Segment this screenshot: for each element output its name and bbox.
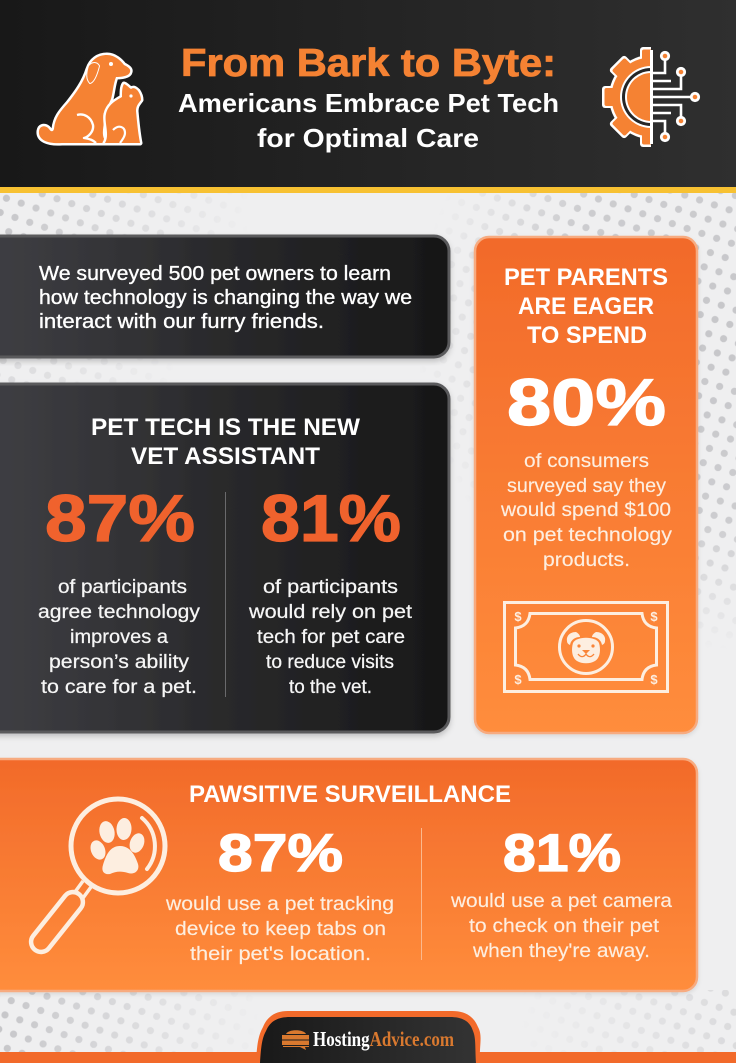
stat: 80%: products. <box>543 549 630 571</box>
heading <box>91 414 360 470</box>
icon: dollar bill with dog <box>504 602 668 692</box>
panel: pawsitive surveillance <box>0 759 697 991</box>
title <box>178 42 559 153</box>
stat: 87%: improves a <box>70 626 168 648</box>
heading: ARE EAGER <box>518 293 654 320</box>
stat: 87% <box>38 481 200 698</box>
icon: magnifying glass with paw <box>27 799 165 956</box>
stat: 81%: to the vet. <box>289 676 372 698</box>
logo wordmark: HostingAdvice.com <box>313 1027 454 1051</box>
icon: hosting logo <box>282 1030 309 1050</box>
stat: 81% <box>450 824 672 962</box>
stat: 81%: to reduce visits <box>266 651 394 673</box>
panel: intro <box>0 236 449 357</box>
icon: dollar bill with dog: $ <box>514 672 522 687</box>
title: Americans Embrace Pet Tech <box>178 88 559 118</box>
heading: PAWSITIVE SURVEILLANCE <box>189 781 511 808</box>
stat: 87%: 87% <box>45 481 195 555</box>
title: for Optimal Care <box>257 123 479 153</box>
intro text: We surveyed 500 pet owners to learn <box>39 263 391 285</box>
panel: pet tech is the new vet assistant <box>0 384 449 732</box>
stat: 81%: 81% <box>261 481 401 555</box>
stat: 81%: of participants <box>263 576 398 598</box>
intro text <box>39 263 412 333</box>
stat: 80%: surveyed say they <box>507 475 666 497</box>
heading: PET PARENTS <box>504 264 668 291</box>
stat: 87%: would use a pet tracking <box>165 893 394 915</box>
stat: 87%: person’s ability <box>49 651 189 673</box>
stat: 80% <box>500 365 672 571</box>
stat: 80%: would spend $100 <box>500 499 671 521</box>
stat: 87%: agree technology <box>38 601 200 623</box>
stat: 81%: would use a pet camera <box>450 890 672 912</box>
icon: dollar bill with dog: $ <box>650 609 658 624</box>
heading: PET TECH IS THE NEW <box>91 414 360 441</box>
intro text: interact with our furry friends. <box>39 311 324 333</box>
stat: 81% <box>248 481 413 698</box>
stat: 87%: device to keep tabs on <box>175 918 386 940</box>
icon: dollar bill with dog: $ <box>514 609 522 624</box>
title: From Bark to Byte: <box>181 42 556 85</box>
icon: dollar bill with dog: $ <box>650 672 658 687</box>
stat: 81%: tech for pet care <box>257 626 405 648</box>
footer <box>0 1011 736 1063</box>
stat: 80%: on pet technology <box>503 524 672 546</box>
stat: 87%: of participants <box>58 576 187 598</box>
icon: gear with circuit lines <box>602 47 699 147</box>
icon: dog and cat <box>39 55 141 143</box>
header band <box>0 0 736 193</box>
stat: 81%: would rely on pet <box>248 601 413 623</box>
heading: TO SPEND <box>527 322 647 349</box>
stat: 81%: 81% <box>503 824 621 883</box>
heading <box>504 264 668 349</box>
stat: 81%: to check on their pet <box>469 915 660 937</box>
stat: 87% <box>165 824 394 965</box>
panel: pet parents are eager to spend <box>475 237 697 733</box>
stat: 87%: their pet's location. <box>190 943 371 965</box>
stat: 81%: when they're away. <box>472 940 650 962</box>
stat: 80%: 80% <box>507 365 666 439</box>
intro text: how technology is changing the way we <box>39 287 412 309</box>
stat: 80%: of consumers <box>524 450 649 472</box>
stat: 87%: to care for a pet. <box>41 676 197 698</box>
heading: VET ASSISTANT <box>131 443 320 470</box>
stat: 87%: 87% <box>218 824 343 883</box>
